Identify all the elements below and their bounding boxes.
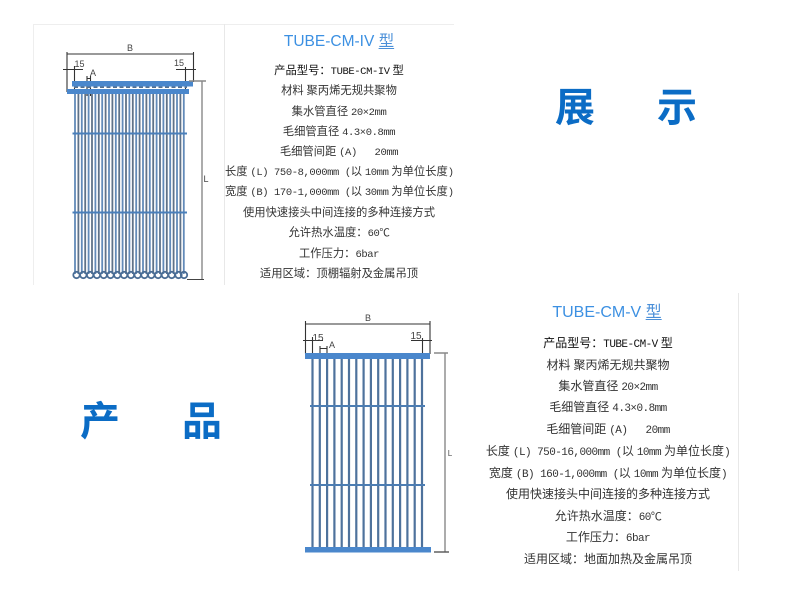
spec: connection: 使用快速接头中间连接的多种连接方式 [506,487,710,501]
heading glyph: 品: 品 [182,389,222,447]
spec: pressure: 工作压力：6bar [299,248,379,261]
dimension 15 and A: 15 [174,58,184,68]
heading: TUBE-CM-IV: TUBE-CM-IV 型 [284,33,394,50]
dimension 15 and A: 15 [74,59,85,69]
dimension L: L [448,449,453,458]
spec: capillary diameter: 毛细管直径 4.3×0.8mm [283,126,395,139]
top header bars [67,81,193,94]
panel divider [224,24,225,285]
dimension 15 and A: 15 [312,333,324,344]
dimension 15 and A: A [329,340,335,350]
spec: model: 产品型号：TUBE-CM-V 型 [543,336,673,351]
dimension B: B [127,43,133,53]
diagram: TUBE-CM-IV mat [63,43,209,280]
spec: application: 适用区域：地面加热及金属吊顶 [524,552,692,566]
dimension 15 and A: 15 [410,331,422,342]
capillary tubes [312,358,422,548]
spec: application: 适用区域：顶棚辐射及金属吊顶 [260,268,418,280]
top header bar [305,353,430,359]
panel border: top and left edges [33,24,454,285]
spec: capillary spacing: 毛细管间距 (A) 20mm [546,422,670,437]
spec: length: 长度 (L) 750-8,000mm (以 10mm 为单位长度) [225,166,454,179]
bottom tube loops [73,272,187,278]
dimension B: B [365,313,371,323]
spec: model: 产品型号：TUBE-CM-IV 型 [274,65,404,78]
spec: water temperature: 允许热水温度：60℃ [288,227,390,240]
spec list: TUBE-CM-V [486,336,730,566]
spec: material: 材料 聚丙烯无规共聚物 [281,85,397,97]
spec: width: 宽度 (B) 160-1,000mm (以 10mm 为单位长度) [489,466,727,481]
diagram: TUBE-CM-V mat [303,313,453,553]
heading glyph: 产: 产 [80,389,120,447]
dimension 15 and A [303,331,432,368]
heading glyph: 示: 示 [657,75,697,133]
spec: material: 材料 聚丙烯无规共聚物 [546,358,670,372]
heading: TUBE-CM-V: TUBE-CM-V 型 [552,304,662,321]
heading glyph: 展: 展 [555,75,595,133]
spec list: TUBE-CM-IV [225,64,454,280]
dimension B [67,43,194,92]
spec: water temperature: 允许热水温度：60℃ [555,509,661,524]
dimension 15 and A: A [90,68,96,78]
spec: capillary diameter: 毛细管直径 4.3×0.8mm [549,400,667,415]
dimension L [187,81,209,280]
cross bars [310,406,425,485]
dimension 15 and A [63,58,196,96]
spec: header pipe diameter: 集水管直径 20×2mm [292,106,386,119]
spec: connection: 使用快速接头中间连接的多种连接方式 [243,207,435,219]
panel divider: right edge [738,293,739,571]
spec: width: 宽度 (B) 170-1,000mm (以 30mm 为单位长度) [225,186,454,199]
bottom header bar [305,547,431,552]
spec: pressure: 工作压力：6bar [566,530,650,545]
spec: header pipe diameter: 集水管直径 20×2mm [558,379,658,394]
spec: capillary spacing: 毛细管间距 (A) 20mm [280,146,398,159]
cross bars [72,134,187,212]
dimension B [306,313,430,354]
panel: TUBE-CM-IV product [33,24,454,285]
capillary tubes [75,94,184,274]
dimension L [434,353,453,552]
dimension L: L [203,174,209,184]
spec: length: 长度 (L) 750-16,000mm (以 10mm 为单位长度) [486,444,730,459]
